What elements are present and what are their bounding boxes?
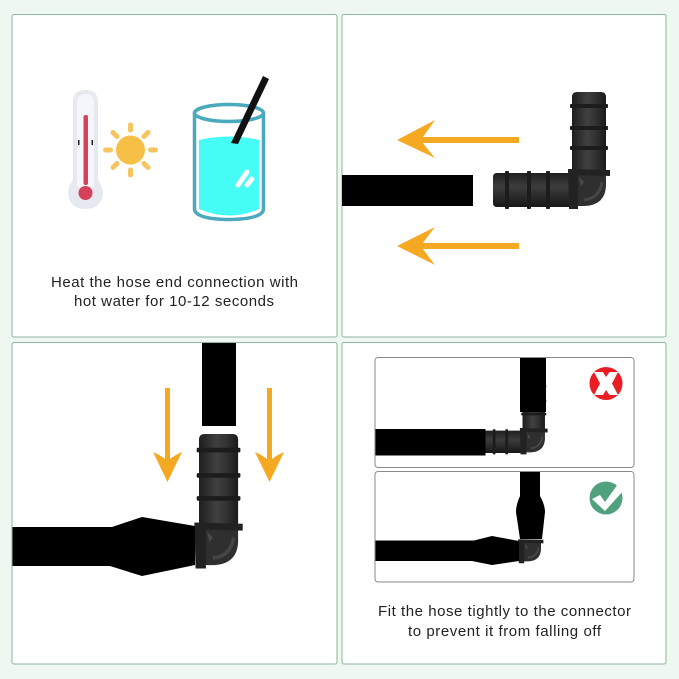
icon: thermometer xyxy=(68,90,103,209)
text: heat instruction xyxy=(51,274,298,310)
text: heat instruction: Heat the hose end connection with xyxy=(51,274,298,291)
panel: heat the hose end xyxy=(12,14,337,337)
hose xyxy=(342,175,473,206)
arrow: upper left xyxy=(397,120,519,158)
panel: push hose onto connector xyxy=(12,342,337,664)
icon: glass of hot water with straw xyxy=(194,76,269,220)
hose: horizontal with stretched end xyxy=(12,517,195,576)
arrow: left down xyxy=(153,388,182,482)
hose: vertical stretched xyxy=(516,472,545,539)
hose: horizontal stretched xyxy=(376,536,519,565)
connector exposed xyxy=(470,377,548,454)
text: fit instruction: to prevent it from falling off xyxy=(408,623,602,640)
text: heat instruction: hot water for 10-12 seconds xyxy=(74,293,274,310)
box: correct fit xyxy=(375,472,634,582)
hose: horizontal xyxy=(376,429,486,456)
text: fit instruction xyxy=(378,603,631,640)
arrow: lower left xyxy=(397,227,519,265)
connector seated xyxy=(518,539,543,563)
panel: fit tightly comparison xyxy=(342,342,666,664)
elbow connector xyxy=(493,92,610,209)
elbow connector xyxy=(194,434,243,569)
box: wrong fit xyxy=(375,358,634,468)
text: fit instruction: Fit the hose tightly to the connector xyxy=(378,603,631,620)
icon: green check xyxy=(590,482,624,514)
icon: sun xyxy=(106,125,156,175)
icon: red cross xyxy=(590,367,622,400)
hose: vertical xyxy=(520,358,546,412)
panel: push connector toward hose xyxy=(342,14,666,337)
arrow: right down xyxy=(255,388,284,482)
hose: vertical xyxy=(202,343,236,426)
